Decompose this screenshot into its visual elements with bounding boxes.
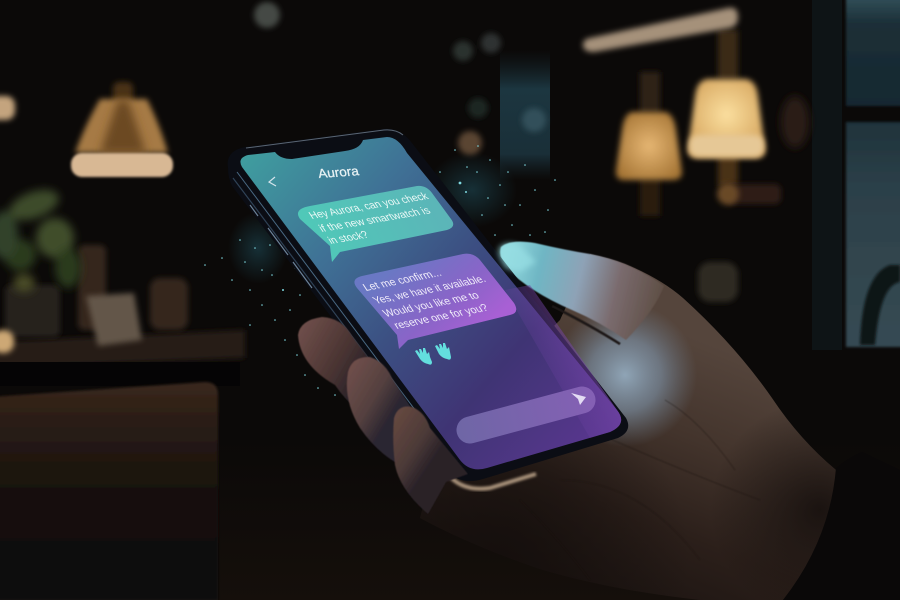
icon: back chevron: [269, 177, 276, 186]
ceiling light bar: [583, 8, 738, 52]
assistant message bubble: [354, 254, 516, 349]
icon: send arrow: [571, 393, 586, 405]
sleeve at the wrist: [783, 452, 900, 600]
table top at left: [0, 330, 245, 386]
app title: Aurora: Aurora: [317, 163, 361, 181]
user message bubble: in stock?: [326, 230, 371, 246]
screen purple sheen: [505, 285, 621, 438]
sofa at lower left: [0, 382, 218, 600]
hand: palm and wrist: [420, 254, 836, 600]
screen: [240, 137, 621, 469]
side edge highlight: [233, 178, 448, 464]
side buttons: [250, 205, 312, 288]
background bokeh lights: [0, 2, 738, 353]
hand: thumb tip touching the screen: [499, 243, 536, 272]
particle glow behind phone: [228, 152, 517, 284]
phone body: [228, 129, 628, 481]
message input pill: [470, 400, 582, 430]
assistant message bubble: reserve one for you?: [392, 303, 491, 331]
gold bottom rim: [448, 474, 536, 489]
top edge highlight: [246, 130, 403, 148]
phone: [228, 129, 628, 489]
pendant lamp: left: [71, 82, 173, 177]
user message bubble: Hey Aurora, can you check: [307, 191, 431, 221]
sparkle particles: [204, 145, 556, 396]
small lamp at far left: [0, 96, 15, 120]
hand: thumb: [500, 242, 664, 340]
pendant lamp: centre right: [616, 72, 682, 216]
palm creases: [612, 400, 731, 488]
user message bubble: if the new smartwatch is: [317, 206, 433, 234]
hand: middle finger: [347, 357, 428, 462]
pendant lamp: right: [688, 30, 809, 205]
icon: waving hands: [415, 343, 451, 365]
assistant message bubble: Let me confirm...: [361, 268, 444, 293]
gap between thumb and palm: [552, 306, 620, 344]
hand: index finger: [298, 317, 392, 412]
assistant message bubble: Yes, we have it available.: [371, 274, 488, 306]
plant and shelf objects: [0, 184, 188, 346]
hand: ring finger: [393, 406, 468, 514]
user message bubble: [298, 186, 453, 262]
assistant message bubble: Would you like me to: [381, 290, 482, 319]
